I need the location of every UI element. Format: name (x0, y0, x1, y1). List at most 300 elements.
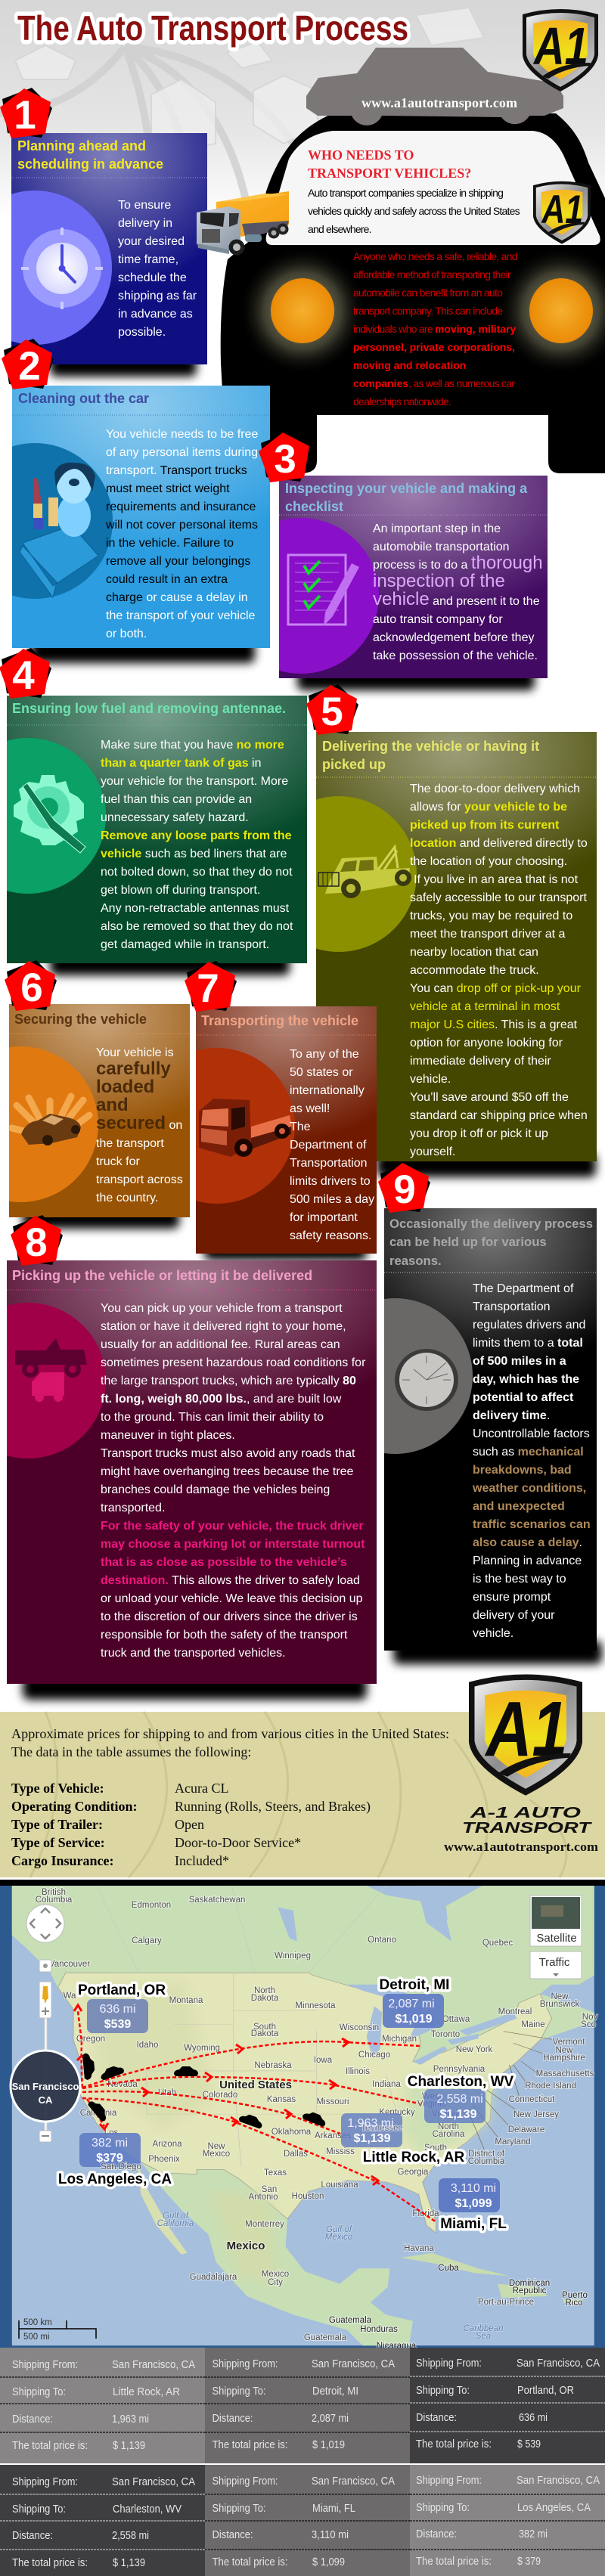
icon: wall clock (395, 1349, 458, 1411)
map place labels: Columbia (36, 1896, 73, 1905)
text 7: internationally (290, 1084, 365, 1097)
text 3: thorough (471, 553, 543, 573)
text 2: of any personal items during (106, 446, 258, 459)
map place labels: Montreal (498, 2007, 532, 2016)
text 2: will not cover personal items (105, 519, 258, 532)
map place labels: Guatemala (304, 2333, 347, 2342)
callout: Los Angeles: Los Angeles, CA (58, 2171, 172, 2187)
map place labels: Michigan (382, 2035, 417, 2044)
price table: Detroit: The total price is: (212, 2438, 287, 2451)
text 3: inspection of the (373, 571, 505, 591)
grey car silhouette with website (306, 48, 563, 126)
text 7: limits drivers to (290, 1175, 371, 1188)
text 8: sometimes present hazardous road conditions for (101, 1356, 366, 1369)
map place labels: Gulf of (163, 2212, 190, 2221)
text 8: You can pick up your vehicle from a transport (101, 1302, 343, 1315)
text 4: fuel than this can provide an (101, 793, 252, 806)
heading 5: Delivering the vehicle or having it (322, 739, 539, 754)
text 3: process is to do a (373, 559, 471, 572)
map place labels: Massachusetts (536, 2069, 594, 2078)
map place labels: Guadalajara (190, 2273, 237, 2282)
heading 9: can be held up for various (389, 1235, 547, 1249)
text 9: of 500 miles in a (473, 1355, 566, 1368)
text: anyone who needs: moving and relocation (353, 359, 466, 371)
text 5: your vehicle to be (464, 801, 567, 814)
text: auto transport companies: and elsewhere. (308, 223, 371, 235)
map place labels: Maine (521, 2020, 545, 2029)
map place labels: Caribbean (463, 2324, 504, 2333)
text 5: . This is a great (495, 1018, 578, 1031)
text 9: . (579, 1536, 582, 1549)
map place labels: New Jersey (513, 2110, 559, 2119)
price table: Portland: Shipping From: (416, 2357, 482, 2370)
price table: Little Rock: Shipping From: (12, 2358, 78, 2371)
text: auto transport companies: Auto transport companies specialize in shipping (308, 187, 503, 199)
text 7: Transportation (290, 1157, 368, 1170)
map place labels: Dakota (251, 2029, 279, 2038)
map place labels: Wa (64, 1992, 76, 2001)
callout: Los Angeles: San Diego (101, 2162, 141, 2171)
logo shield on windshield (533, 181, 591, 244)
map place labels: Columbia (468, 2157, 505, 2166)
map place labels (36, 1888, 597, 2351)
heading 2: Cleaning out the car (18, 391, 149, 406)
text 2: or cause a delay in (146, 591, 248, 604)
price table: Portland: Shipping To: (416, 2384, 470, 2397)
routes with arrows (74, 2005, 436, 2222)
text 6: transport across (96, 1173, 183, 1186)
text 1: To ensure (118, 199, 171, 212)
panel 2: cleaning out the car (0, 265, 345, 648)
heading 7: Transporting the vehicle (201, 1013, 358, 1028)
assumption values: Running (Rolls, Steers, and Brakes) (175, 1799, 371, 1815)
map of routes from San Francisco (0, 1886, 605, 2351)
map place labels: New York (456, 2045, 493, 2054)
map place labels: Iowa (314, 2056, 333, 2065)
map place labels: Calgary (132, 1936, 162, 1945)
logo: A-1 Auto Transport: www.a1autotransport.com (444, 1840, 598, 1854)
icon: dog, lipstick and books (20, 463, 98, 597)
badge 8 (11, 1215, 63, 1266)
text 9: . (547, 1409, 550, 1422)
icon: jeep and small truck (15, 1338, 87, 1402)
price table: Charleston: San Francisco, CA (112, 2475, 195, 2488)
background: tyre tread pattern (0, 0, 605, 219)
text: anyone who needs: dealerships nationwide. (353, 395, 451, 408)
logo: A-1 Auto Transport: TRANSPORT (462, 1820, 592, 1837)
text 9: total (557, 1337, 583, 1350)
panel 1: planning ahead (0, 23, 253, 364)
price table: Little Rock: San Francisco, CA (112, 2358, 195, 2371)
price table: Miami: 3,110 mi (312, 2528, 349, 2541)
badge 9 (378, 1162, 430, 1213)
text 2: remove all your belongings (106, 555, 250, 568)
text: anyone who needs: transport company. This can include (353, 305, 503, 317)
panel: assumptions table (0, 1712, 605, 1877)
price table: Miami (205, 2465, 410, 2576)
panel 6: securing (0, 906, 244, 1217)
origin marker: San Francisco (11, 2051, 80, 2122)
price table: Los Angeles: The total price is: (416, 2555, 492, 2568)
badge 3 (259, 432, 311, 482)
price table: Portland (410, 2348, 605, 2463)
map place labels: Pennsylvania (433, 2065, 486, 2074)
price table: Los Angeles: 382 mi (519, 2528, 548, 2540)
text: anyone who needs: , as well as numerous car (408, 377, 515, 389)
price table: Miami: Distance: (212, 2528, 253, 2541)
text 5: meet the transport driver at a (410, 928, 566, 941)
text 9: delivery of your (473, 1609, 555, 1622)
heading 8: Picking up the vehicle or letting it be delivered (12, 1268, 312, 1283)
text 3: An important step in the (373, 522, 501, 535)
text 2: or both. (106, 628, 147, 640)
price table: Charleston: Distance: (12, 2529, 53, 2542)
text: anyone who needs: automobile can benefit from an auto (353, 287, 503, 299)
text 8: might have overhanging trees because the tree (101, 1465, 354, 1478)
panel 9: delivery delays (316, 1087, 605, 1651)
map place labels: Sea (476, 2332, 491, 2341)
badge 2: 2 (18, 344, 41, 389)
badge 1: 1 (14, 93, 36, 138)
text 4: such as bed liners that are (141, 848, 287, 860)
text 5: accommodate the truck. (410, 964, 539, 977)
text 1: schedule the (118, 271, 187, 284)
badge 5 (306, 684, 358, 735)
callout: Little Rock: Tennessee (361, 2124, 403, 2133)
callout: Los Angeles (58, 2133, 172, 2187)
heading: who needs to transport vehicles: TRANSPORT VEHICLES? (308, 166, 471, 181)
text 7: Department of (290, 1139, 367, 1152)
map place labels: Mexico (227, 2240, 265, 2252)
text 8: or unload your vehicle. We leave this decision up (101, 1592, 363, 1605)
text 8: maneuver in tight places. (101, 1429, 235, 1442)
callout: Little Rock: 1,963 mi (347, 2117, 394, 2130)
text 8: to the ground. This can limit their ability to (101, 1411, 324, 1424)
text 8: station or have it delivered right to your home, (101, 1320, 346, 1333)
map place labels: Wyoming (184, 2044, 220, 2053)
text 8: usually for an additional fee. Rural areas can (101, 1338, 340, 1351)
text 9: limits them to a (473, 1337, 557, 1350)
price table: Los Angeles: Distance: (416, 2528, 457, 2540)
callout: Charleston: Virginia (432, 2109, 461, 2119)
map place labels: Mexico (325, 2233, 353, 2242)
map place labels: Nebraska (254, 2061, 292, 2070)
heading 9: Occasionally the delivery process (389, 1217, 593, 1231)
text 4: Remove any loose parts from the (101, 829, 292, 842)
heading 9: reasons. (389, 1254, 442, 1268)
heading: who needs to transport vehicles: WHO NEEDS TO (308, 147, 414, 163)
text 9: potential to affect (473, 1391, 574, 1404)
text 8: truck and the transported vehicles. (101, 1647, 286, 1660)
map place labels: San (262, 2185, 277, 2194)
text 4: unnecessary safety hazard. (101, 811, 249, 824)
panel 3: inspecting (209, 370, 605, 678)
map place labels: Gulf of (326, 2225, 353, 2234)
map place labels: New (555, 2046, 573, 2055)
map place labels: Idaho (137, 2041, 158, 2050)
price table: Miami: $ 1,099 (312, 2556, 345, 2568)
windshield panel (266, 131, 600, 245)
text 9: vehicle. (473, 1627, 513, 1640)
text 6: carefully (96, 1059, 171, 1079)
price table: Portland: Portland, OR (517, 2384, 574, 2397)
text 3: and present it to the (430, 595, 540, 608)
map place labels: New (551, 1992, 569, 2001)
price table: Little Rock (0, 2348, 205, 2463)
text 5: The door-to-door delivery which (410, 783, 580, 795)
text 8: the large transport trucks, which are typically (101, 1375, 343, 1387)
badge 7: 7 (197, 966, 219, 1011)
text 9: traffic scenarios can (473, 1518, 591, 1531)
text 1: delivery in (118, 217, 172, 230)
text 8: may choose a parking lot or interstate turnout (101, 1538, 365, 1551)
text 5: and delivered directly to (456, 837, 588, 850)
text 8: branches could damage the vehicles being (101, 1483, 330, 1496)
map place labels: South (253, 2023, 276, 2032)
callout: Detroit (380, 1977, 449, 2028)
text 6: the country. (96, 1192, 158, 1204)
map place labels: British (42, 1888, 66, 1897)
price table: Los Angeles: Los Angeles, CA (517, 2501, 591, 2514)
text 4: no more (237, 739, 284, 752)
price table: Los Angeles: Shipping From: (416, 2474, 482, 2487)
icon: delivery truck (197, 191, 289, 256)
map place labels: Georgia (398, 2168, 429, 2177)
text 5: drop off or pick-up your (457, 982, 582, 995)
badge 3: 3 (274, 437, 296, 482)
price table: Little Rock: $ 1,139 (113, 2439, 145, 2452)
text 5: trucks, you may be required to (410, 910, 572, 922)
map place labels: California (157, 2219, 194, 2228)
text 4: Any non-retractable antennas must (101, 902, 290, 915)
badge 4: 4 (12, 653, 35, 698)
text 8: that is as close as possible to the vehicle’s (101, 1556, 347, 1569)
car markers on routes (82, 2053, 327, 2129)
map place labels: North (254, 1986, 275, 1995)
callout: Charleston: 2,558 mi (436, 2093, 483, 2106)
text 6: loaded (96, 1077, 154, 1097)
text 5: immediate delivery of their (410, 1055, 551, 1068)
map place labels: Minnesota (295, 2001, 336, 2010)
price table: Los Angeles: $ 379 (517, 2555, 541, 2568)
map place labels: Wisconsin (340, 2023, 379, 2032)
price table: Miami: Miami, FL (312, 2502, 355, 2515)
assumption labels: Type of Service: (11, 1835, 105, 1850)
icon: hands and car (12, 1096, 89, 1145)
text 9: breakdowns, bad (473, 1464, 572, 1477)
intro text: Approximate prices for shipping to and from various cities in the United States: (11, 1726, 449, 1741)
map place labels: Utah (158, 2088, 176, 2097)
text: anyone who needs: individuals who are (353, 323, 435, 335)
text 5: yourself. (410, 1145, 455, 1158)
heading 3: Inspecting your vehicle and making a (285, 481, 528, 496)
map place labels: Nicaragua (377, 2342, 417, 2351)
text 2: transport. (106, 464, 160, 477)
icon: tow truck (318, 847, 411, 898)
text 4: Make sure that you have (101, 739, 237, 752)
map place labels: Brunswick (540, 2000, 579, 2009)
text 7: The (290, 1121, 311, 1133)
callout: Little Rock (341, 2113, 464, 2165)
text 5: picked up from its current (410, 819, 560, 832)
map place labels: Indiana (372, 2080, 401, 2089)
assumption labels: Type of Trailer: (11, 1817, 103, 1832)
map place labels: Florida (412, 2209, 439, 2218)
map place labels: Vancouver (49, 1960, 90, 1969)
callout: Los Angeles: 382 mi (92, 2137, 128, 2150)
map place labels: Colorado (203, 2091, 237, 2100)
text 9: weather conditions, (472, 1482, 586, 1495)
heading 1: scheduling in advance (17, 157, 163, 172)
map place labels: Puerto (562, 2291, 588, 2300)
price table: Detroit: Shipping From: (212, 2357, 278, 2370)
map place labels: Dakota (251, 1994, 279, 2003)
callout: Portland (78, 1982, 166, 2033)
map place labels: Phoenix (148, 2155, 180, 2164)
map place labels: Quebec (482, 1939, 513, 1948)
heading 5: picked up (322, 757, 386, 772)
text 4: your vehicle for the transport. More (101, 775, 288, 788)
text 3: acknowledgement before they (373, 631, 534, 644)
assumption labels: Cargo Insurance: (11, 1853, 113, 1868)
map place labels: Sco (581, 2020, 596, 2029)
map place labels: Republic (513, 2286, 547, 2295)
badge 4 (0, 648, 51, 699)
text 5: nearby location that can (410, 946, 538, 959)
badge 1 (0, 88, 52, 138)
map controls: 500 km (23, 2318, 52, 2327)
price table: Charleston: 2,558 mi (112, 2529, 149, 2542)
text: anyone who needs: moving, military (435, 323, 517, 335)
map place labels: Illinois (346, 2067, 370, 2076)
text 5: You can (410, 982, 457, 995)
text 4: get damaged while in transport. (101, 938, 269, 951)
map place labels: New (207, 2142, 225, 2151)
price table: Charleston: The total price is: (12, 2556, 88, 2569)
assumption labels: Type of Vehicle: (11, 1781, 104, 1796)
text 7: 50 states or (290, 1066, 353, 1079)
logo: A-1 Auto Transport: A-1 AUTO (469, 1805, 582, 1821)
text 4: than a quarter tank of gas (101, 757, 249, 770)
panel 5: delivering (244, 607, 605, 1161)
map place labels: Ottawa (442, 2015, 470, 2024)
map place labels: Monterrey (245, 2220, 284, 2229)
map place labels: Guatemala (329, 2316, 372, 2325)
map controls: Satellite (536, 1932, 577, 1945)
text 9: such as (473, 1446, 518, 1458)
text 5: vehicle at a terminal in most (410, 1000, 560, 1013)
text 1: shipping as far (118, 290, 197, 302)
text 9: delivery time (473, 1409, 547, 1422)
price table: Detroit: Distance: (212, 2412, 253, 2425)
map controls: Traffic (539, 1956, 570, 1969)
callout: Miami (439, 2178, 507, 2232)
badge 9: 9 (393, 1167, 416, 1212)
text 1: possible. (118, 326, 166, 339)
text 5: You’ll save around $50 off the (410, 1091, 569, 1104)
map place labels: Port-au-Prince (478, 2298, 534, 2307)
map place labels: Oklahoma (271, 2128, 312, 2137)
text 9: day, which has the (473, 1373, 579, 1386)
text 8: For the safety of your vehicle, the truck driver (101, 1520, 364, 1533)
price table: Charleston: $ 1,139 (113, 2556, 145, 2569)
price table: Los Angeles: Shipping To: (416, 2501, 470, 2514)
badge 8: 8 (25, 1220, 48, 1265)
panel 8: picking up (0, 1136, 449, 1684)
text 8: ft. long, weigh 80,000 lbs. (101, 1393, 247, 1406)
text 3: automobile transportation (373, 541, 510, 553)
grey car silhouette with website: www.a1autotransport.com (361, 95, 517, 110)
price table: Portland: Distance: (416, 2411, 457, 2424)
text 7: safety reasons. (290, 1229, 372, 1242)
text 3: vehicle (373, 589, 430, 609)
callout: Charleston (408, 2074, 514, 2123)
text 9: Uncontrollable factors (473, 1427, 590, 1440)
callout: Portland: 636 mi (99, 2003, 136, 2016)
map place labels: California (80, 2109, 117, 2118)
map place labels: Houston (292, 2192, 324, 2201)
text 8: , and are built low (247, 1393, 342, 1406)
text 9: mechanical (518, 1446, 584, 1458)
price table: Little Rock: Shipping To: (12, 2385, 66, 2398)
map place labels: Arkansas (315, 2131, 351, 2140)
origin marker: San Francisco: San Francisco (12, 2081, 79, 2092)
text: anyone who needs: companies (353, 377, 408, 389)
text 2: requirements and insurance (106, 501, 256, 513)
map place labels: Mississ (326, 2147, 355, 2156)
map place labels: City (268, 2278, 283, 2287)
callout: Portland: Portland, OR (78, 1982, 166, 1998)
map place labels: Nov (582, 2013, 597, 2022)
text 4: not bolted down, so that they do not (101, 866, 293, 879)
map place labels: Missouri (317, 2097, 349, 2106)
text 9: regulates drivers and (473, 1319, 585, 1331)
map place labels: Connecticut (509, 2095, 555, 2104)
text 4: get blown off during transport. (101, 884, 260, 897)
title: The Auto Transport Process (17, 8, 408, 48)
text 6: secured (96, 1113, 166, 1133)
map place labels: Dallas (284, 2150, 308, 2159)
callout: Miami: $1,099 (455, 2197, 492, 2210)
map place labels: United States (219, 2078, 292, 2091)
text 9: also cause a delay (473, 1536, 579, 1549)
text: auto transport companies: vehicles quickly and safely across the United States (308, 205, 520, 217)
text: anyone who needs: Anyone who needs a safe, reliable, and (353, 250, 517, 262)
heading 4: Ensuring low fuel and removing antennae. (12, 701, 286, 716)
text 7: for important (290, 1211, 358, 1224)
text 2: in the vehicle. Failure to (106, 537, 234, 550)
text 9: ensure prompt (473, 1591, 551, 1604)
black car front illustration (221, 48, 605, 473)
price table: Portland: $ 539 (517, 2438, 541, 2450)
text 6: truck for (96, 1155, 140, 1168)
map place labels: Kansas (267, 2095, 296, 2104)
callout: Los Angeles: $379 (96, 2152, 123, 2165)
price table: Little Rock: 1,963 mi (112, 2413, 149, 2426)
map place labels: Saskatchewan (189, 1896, 245, 1905)
text 5: the location of your choosing. (410, 855, 567, 868)
logo: A-1 Auto Transport (444, 1674, 598, 1854)
text 8: 80 (343, 1375, 356, 1387)
price table: Charleston: Shipping To: (12, 2503, 66, 2516)
price table: Charleston: Charleston, WV (113, 2503, 182, 2516)
price table: Detroit: 2,087 mi (312, 2412, 349, 2425)
text 1: your desired (118, 235, 185, 248)
text 6: on (166, 1119, 182, 1132)
price table: Los Angeles (410, 2465, 605, 2576)
text 5: you drop it off or pick it up (410, 1127, 548, 1140)
price table: Miami: Shipping To: (212, 2502, 266, 2515)
